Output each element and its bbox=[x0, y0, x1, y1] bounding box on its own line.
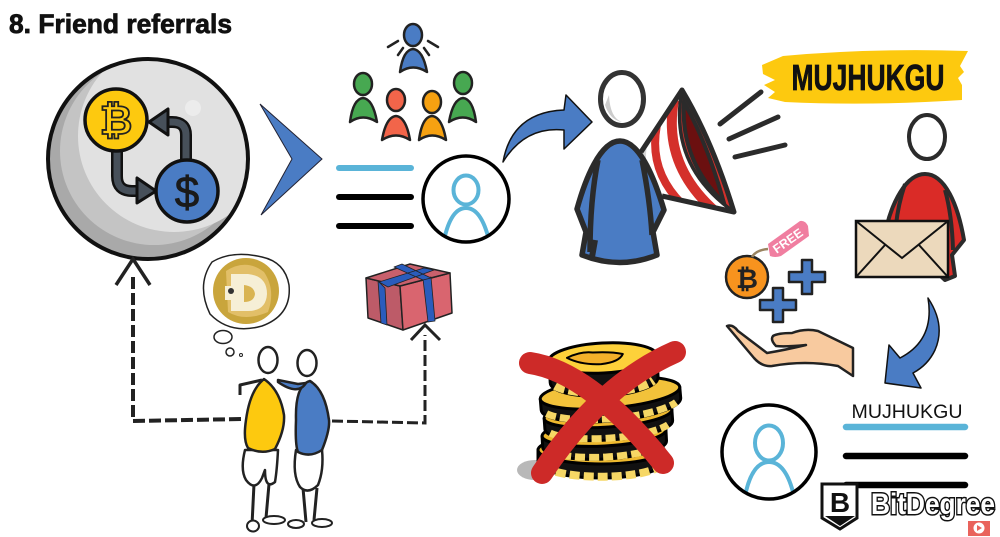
coin layers bbox=[538, 340, 682, 478]
dogecoin bbox=[213, 258, 279, 324]
megaphone bbox=[630, 90, 734, 212]
shield bbox=[822, 484, 857, 529]
icon: crossed-out coin stack bbox=[517, 340, 682, 480]
icon: profile avatar lower bbox=[722, 405, 816, 499]
red cross bbox=[530, 352, 675, 473]
logo: BitDegree bbox=[822, 484, 995, 536]
arrow: dashed up to gift bbox=[332, 325, 440, 423]
bitcoin coin with free tag: ₿ bbox=[736, 264, 758, 294]
icon: bitcoin coin bbox=[85, 89, 147, 151]
open hand bbox=[727, 326, 853, 376]
person: green left bbox=[350, 73, 377, 122]
icon: thought bubble with dogecoin bbox=[203, 254, 289, 356]
person: orange bbox=[419, 91, 446, 140]
code banner: MUJHUKGU bbox=[792, 57, 944, 98]
plus signs bbox=[760, 260, 825, 322]
code banner bbox=[762, 50, 968, 104]
arrow: curved blue arrow to speaker bbox=[503, 95, 592, 162]
person: red bbox=[382, 89, 410, 140]
icon: gift box bbox=[366, 264, 452, 330]
icon: dollar coin bbox=[156, 160, 218, 222]
title: 8. Friend referrals bbox=[9, 9, 232, 39]
signup form lines bbox=[846, 427, 965, 485]
speaker body bbox=[577, 141, 664, 262]
icon: person with megaphone bbox=[577, 72, 734, 262]
icon: two friends bbox=[240, 347, 332, 532]
sound lines bbox=[720, 92, 785, 157]
icon: exchange arrows bbox=[117, 109, 186, 203]
icon: group of people bbox=[350, 24, 476, 140]
speaker head bbox=[600, 72, 644, 126]
arrow: dashed up to big circle bbox=[116, 259, 243, 421]
arrow: blue chevron bbox=[260, 104, 322, 215]
arrow: curved blue arrow to signup form bbox=[885, 298, 939, 388]
envelope bbox=[856, 221, 948, 277]
friend: yellow bbox=[240, 347, 285, 532]
play badge bbox=[968, 521, 990, 536]
bitcoin coin with free tag: FREE bbox=[770, 226, 806, 256]
logo: BitDegree: B bbox=[830, 487, 850, 518]
person: green right bbox=[449, 72, 476, 122]
icon: bitcoin coin: ₿ bbox=[100, 99, 132, 143]
bitcoin coin with free tag bbox=[726, 221, 809, 298]
icon: dollar coin: $ bbox=[175, 168, 199, 217]
referral code handwritten: MUJHUKGU bbox=[852, 402, 962, 423]
icon: big circle with crypto exchange bbox=[46, 57, 250, 261]
icon: profile avatar bbox=[423, 156, 509, 242]
person: blue speaker bbox=[388, 24, 438, 72]
list lines bbox=[339, 168, 411, 226]
icon: person with envelope bbox=[856, 115, 964, 280]
friend: blue bbox=[278, 350, 332, 528]
icon: free bitcoin over open hand bbox=[726, 221, 853, 376]
